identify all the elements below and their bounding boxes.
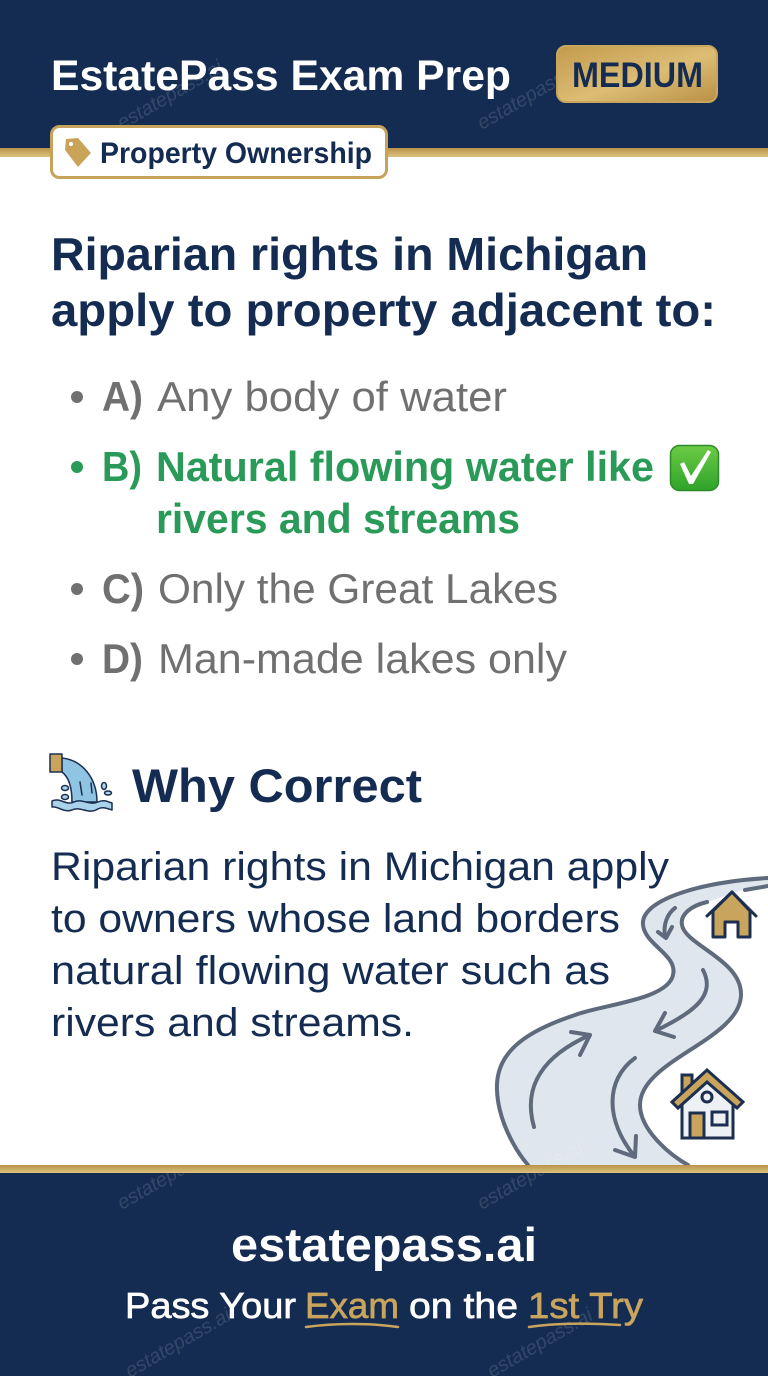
header watermarks: estatepass.ai bbox=[474, 56, 587, 134]
option D: D) bbox=[102, 635, 143, 682]
arrow: top bend bbox=[658, 908, 675, 938]
icon: price tag bbox=[65, 138, 91, 167]
header gold rule bbox=[0, 148, 768, 157]
question heading: apply to property adjacent to: bbox=[51, 284, 716, 336]
footer tagline: Exam bbox=[305, 1285, 399, 1326]
option B correct answer: rivers and streams bbox=[156, 495, 520, 542]
why correct heading: Why Correct bbox=[132, 759, 422, 812]
footer tagline: 1st Try bbox=[528, 1285, 643, 1326]
option B correct answer: Natural flowing water like bbox=[156, 443, 654, 490]
gold underlines bbox=[306, 1324, 620, 1327]
header watermarks: estatepass.ai bbox=[114, 56, 227, 134]
footer watermarks bbox=[114, 1136, 597, 1376]
option B correct answer bbox=[71, 443, 718, 542]
difficulty badge: MEDIUM bbox=[572, 56, 703, 95]
explanation text: rivers and streams. bbox=[51, 1001, 414, 1045]
question heading bbox=[51, 228, 716, 336]
category tag: Property Ownership bbox=[100, 137, 372, 170]
explanation text: natural flowing water such as bbox=[51, 949, 610, 993]
arrow: downstream bbox=[612, 1058, 636, 1157]
footer gold rule bbox=[0, 1165, 768, 1173]
question heading: Riparian rights in Michigan bbox=[51, 228, 648, 280]
option C: C) bbox=[102, 565, 144, 612]
icon: check mark bbox=[670, 446, 718, 490]
explanation text: Riparian rights in Michigan apply bbox=[51, 845, 669, 889]
river illustration bbox=[497, 878, 768, 1165]
explanation text: to owners whose land borders bbox=[51, 897, 620, 941]
header band bbox=[0, 0, 768, 149]
footer tagline bbox=[125, 1285, 643, 1327]
explanation text bbox=[51, 845, 669, 1045]
icon: water pipe bbox=[50, 754, 112, 811]
option D: Man-made lakes only bbox=[158, 635, 567, 682]
option A: A) bbox=[102, 373, 143, 420]
footer watermarks: estatepass.ai bbox=[114, 1136, 227, 1214]
footer site name: estatepass.ai bbox=[231, 1218, 537, 1271]
arrow: middle bend bbox=[655, 970, 707, 1037]
icon: large house bbox=[672, 1070, 743, 1138]
footer tagline: Pass Your bbox=[125, 1285, 296, 1326]
footer watermarks: estatepass.ai bbox=[474, 1136, 587, 1214]
arrow: upstream left bbox=[531, 1032, 590, 1127]
footer tagline: on the bbox=[409, 1285, 518, 1326]
option A: Any body of water bbox=[157, 373, 507, 420]
option C: Only the Great Lakes bbox=[158, 565, 558, 612]
footer band bbox=[0, 1136, 768, 1376]
category tag bbox=[52, 126, 386, 178]
title: EstatePass Exam Prep bbox=[51, 52, 511, 100]
option B correct answer: B) bbox=[102, 443, 142, 490]
header watermarks bbox=[114, 56, 587, 134]
icon: small house bbox=[707, 892, 756, 937]
difficulty badge bbox=[557, 46, 717, 102]
